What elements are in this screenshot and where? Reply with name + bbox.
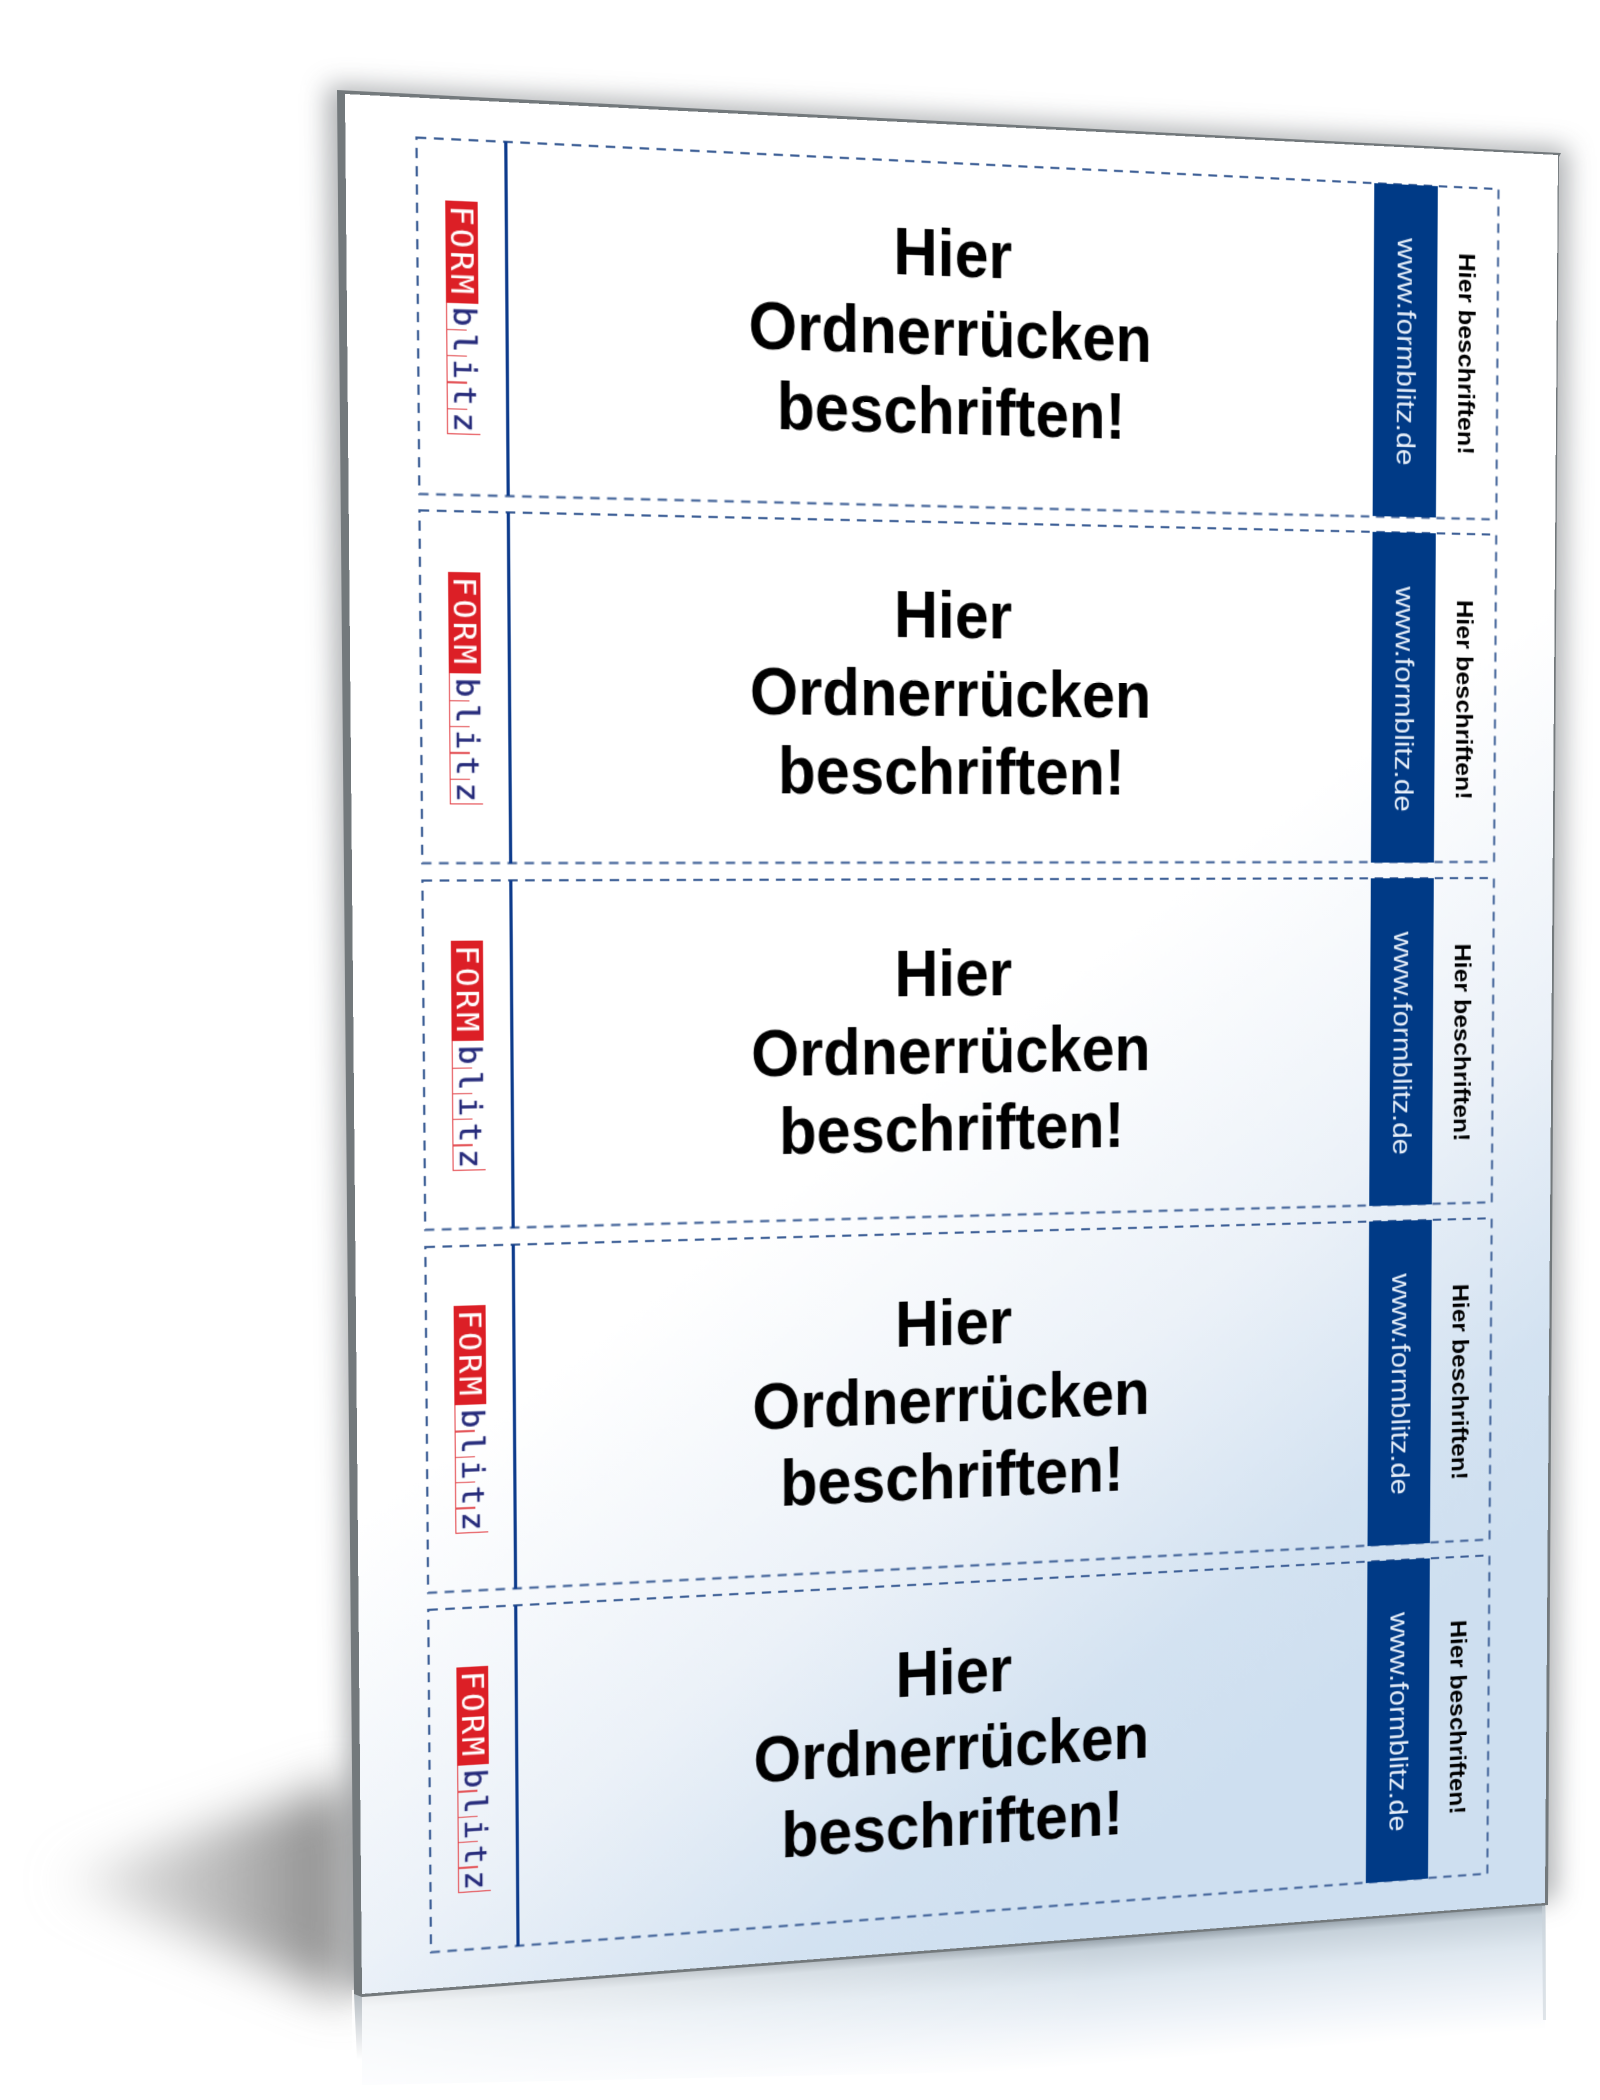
small hint 3: Hier beschriften! bbox=[1448, 943, 1474, 1141]
main label text 2: beschriften! bbox=[778, 733, 1125, 809]
page thickness edges bbox=[337, 90, 1561, 1997]
cut frame 2 bbox=[418, 508, 1498, 866]
divider line 4 bbox=[512, 1245, 517, 1589]
left reflection edge bbox=[354, 1994, 362, 2060]
small hint 2: Hier beschriften! bbox=[1450, 600, 1477, 799]
cut frame 5 bbox=[426, 1554, 1491, 1954]
logo 4 bbox=[451, 1304, 491, 1537]
ground shadow bbox=[55, 1780, 352, 2000]
main label text 5: Hier bbox=[896, 1632, 1012, 1711]
divider line 3 bbox=[509, 881, 515, 1228]
logo 2 bbox=[445, 572, 486, 808]
logo 1 bbox=[443, 200, 483, 439]
logo 3 bbox=[448, 940, 488, 1175]
reflection fade bbox=[352, 1935, 1100, 2090]
sheet of folder spine labels bbox=[345, 94, 1558, 1994]
logo word FORM: FORM bbox=[445, 577, 483, 668]
label row 5 bbox=[426, 1554, 1491, 1954]
divider line 5 bbox=[514, 1605, 520, 1946]
main label text 2: Hier bbox=[894, 577, 1012, 653]
reflection below the page bbox=[362, 1903, 1545, 2085]
logo 5 bbox=[454, 1666, 493, 1897]
paper shadow bbox=[327, 85, 1568, 1990]
small hint 5: Hier beschriften! bbox=[1444, 1620, 1470, 1816]
main label text 5: beschriften! bbox=[781, 1776, 1123, 1871]
main label text 4: Ordnerrücken bbox=[752, 1356, 1150, 1444]
label row 1 bbox=[414, 136, 1500, 522]
blue URL bar 5 bbox=[1365, 1558, 1429, 1883]
divider line 1 bbox=[504, 141, 510, 496]
label row 4 bbox=[424, 1217, 1494, 1595]
main label text 1: Ordnerrücken bbox=[748, 287, 1152, 376]
logo word FORM: FORM bbox=[454, 1670, 490, 1760]
main label text 1: Hier bbox=[893, 213, 1012, 293]
right reflection edge bbox=[1542, 1906, 1546, 2020]
main label text 2 bbox=[750, 577, 1151, 809]
label row 3 bbox=[420, 876, 1496, 1232]
main label text 3: Hier bbox=[894, 937, 1012, 1011]
blue URL bar 2: www.formblitz.de bbox=[1388, 586, 1419, 812]
main label text 2: Ordnerrücken bbox=[750, 654, 1151, 732]
blue URL bar 2 bbox=[1370, 532, 1435, 862]
logo word blitz: blitz bbox=[454, 1408, 491, 1537]
cut frame 4 bbox=[424, 1217, 1494, 1595]
main label text 3: Ordnerrücken bbox=[751, 1012, 1151, 1091]
cut frame 1 bbox=[414, 136, 1500, 522]
label row 2 bbox=[418, 508, 1498, 866]
logo word blitz: blitz bbox=[451, 1045, 488, 1175]
main label text 4: beschriften! bbox=[780, 1433, 1124, 1520]
blue URL bar 1 bbox=[1372, 183, 1437, 517]
blue URL bar 5: www.formblitz.de bbox=[1382, 1611, 1413, 1832]
main label text 5 bbox=[753, 1632, 1149, 1871]
main label text 3 bbox=[751, 937, 1151, 1169]
main label text 4: Hier bbox=[895, 1284, 1012, 1361]
main label text 5: Ordnerrücken bbox=[753, 1700, 1149, 1796]
logo word FORM: FORM bbox=[448, 945, 485, 1035]
cut frame 3 bbox=[420, 876, 1496, 1232]
main label text 3: beschriften! bbox=[779, 1089, 1124, 1169]
blue URL bar 4: www.formblitz.de bbox=[1384, 1273, 1415, 1495]
main label text 1 bbox=[748, 213, 1152, 453]
blue URL bar 3 bbox=[1369, 878, 1433, 1206]
logo word blitz: blitz bbox=[457, 1768, 493, 1897]
logo word FORM: FORM bbox=[451, 1310, 488, 1399]
small hint 4: Hier beschriften! bbox=[1446, 1283, 1472, 1480]
logo word blitz: blitz bbox=[448, 678, 486, 808]
main label text 1: beschriften! bbox=[777, 368, 1125, 453]
main label text 4 bbox=[752, 1284, 1150, 1520]
logo word FORM: FORM bbox=[443, 204, 480, 297]
blue URL bar 4 bbox=[1367, 1220, 1431, 1546]
logo word blitz: blitz bbox=[445, 306, 483, 439]
small hint 1: Hier beschriften! bbox=[1452, 253, 1479, 455]
blue URL bar 1: www.formblitz.de bbox=[1389, 237, 1421, 466]
blue URL bar 3: www.formblitz.de bbox=[1386, 931, 1417, 1155]
divider line 2 bbox=[507, 513, 512, 864]
